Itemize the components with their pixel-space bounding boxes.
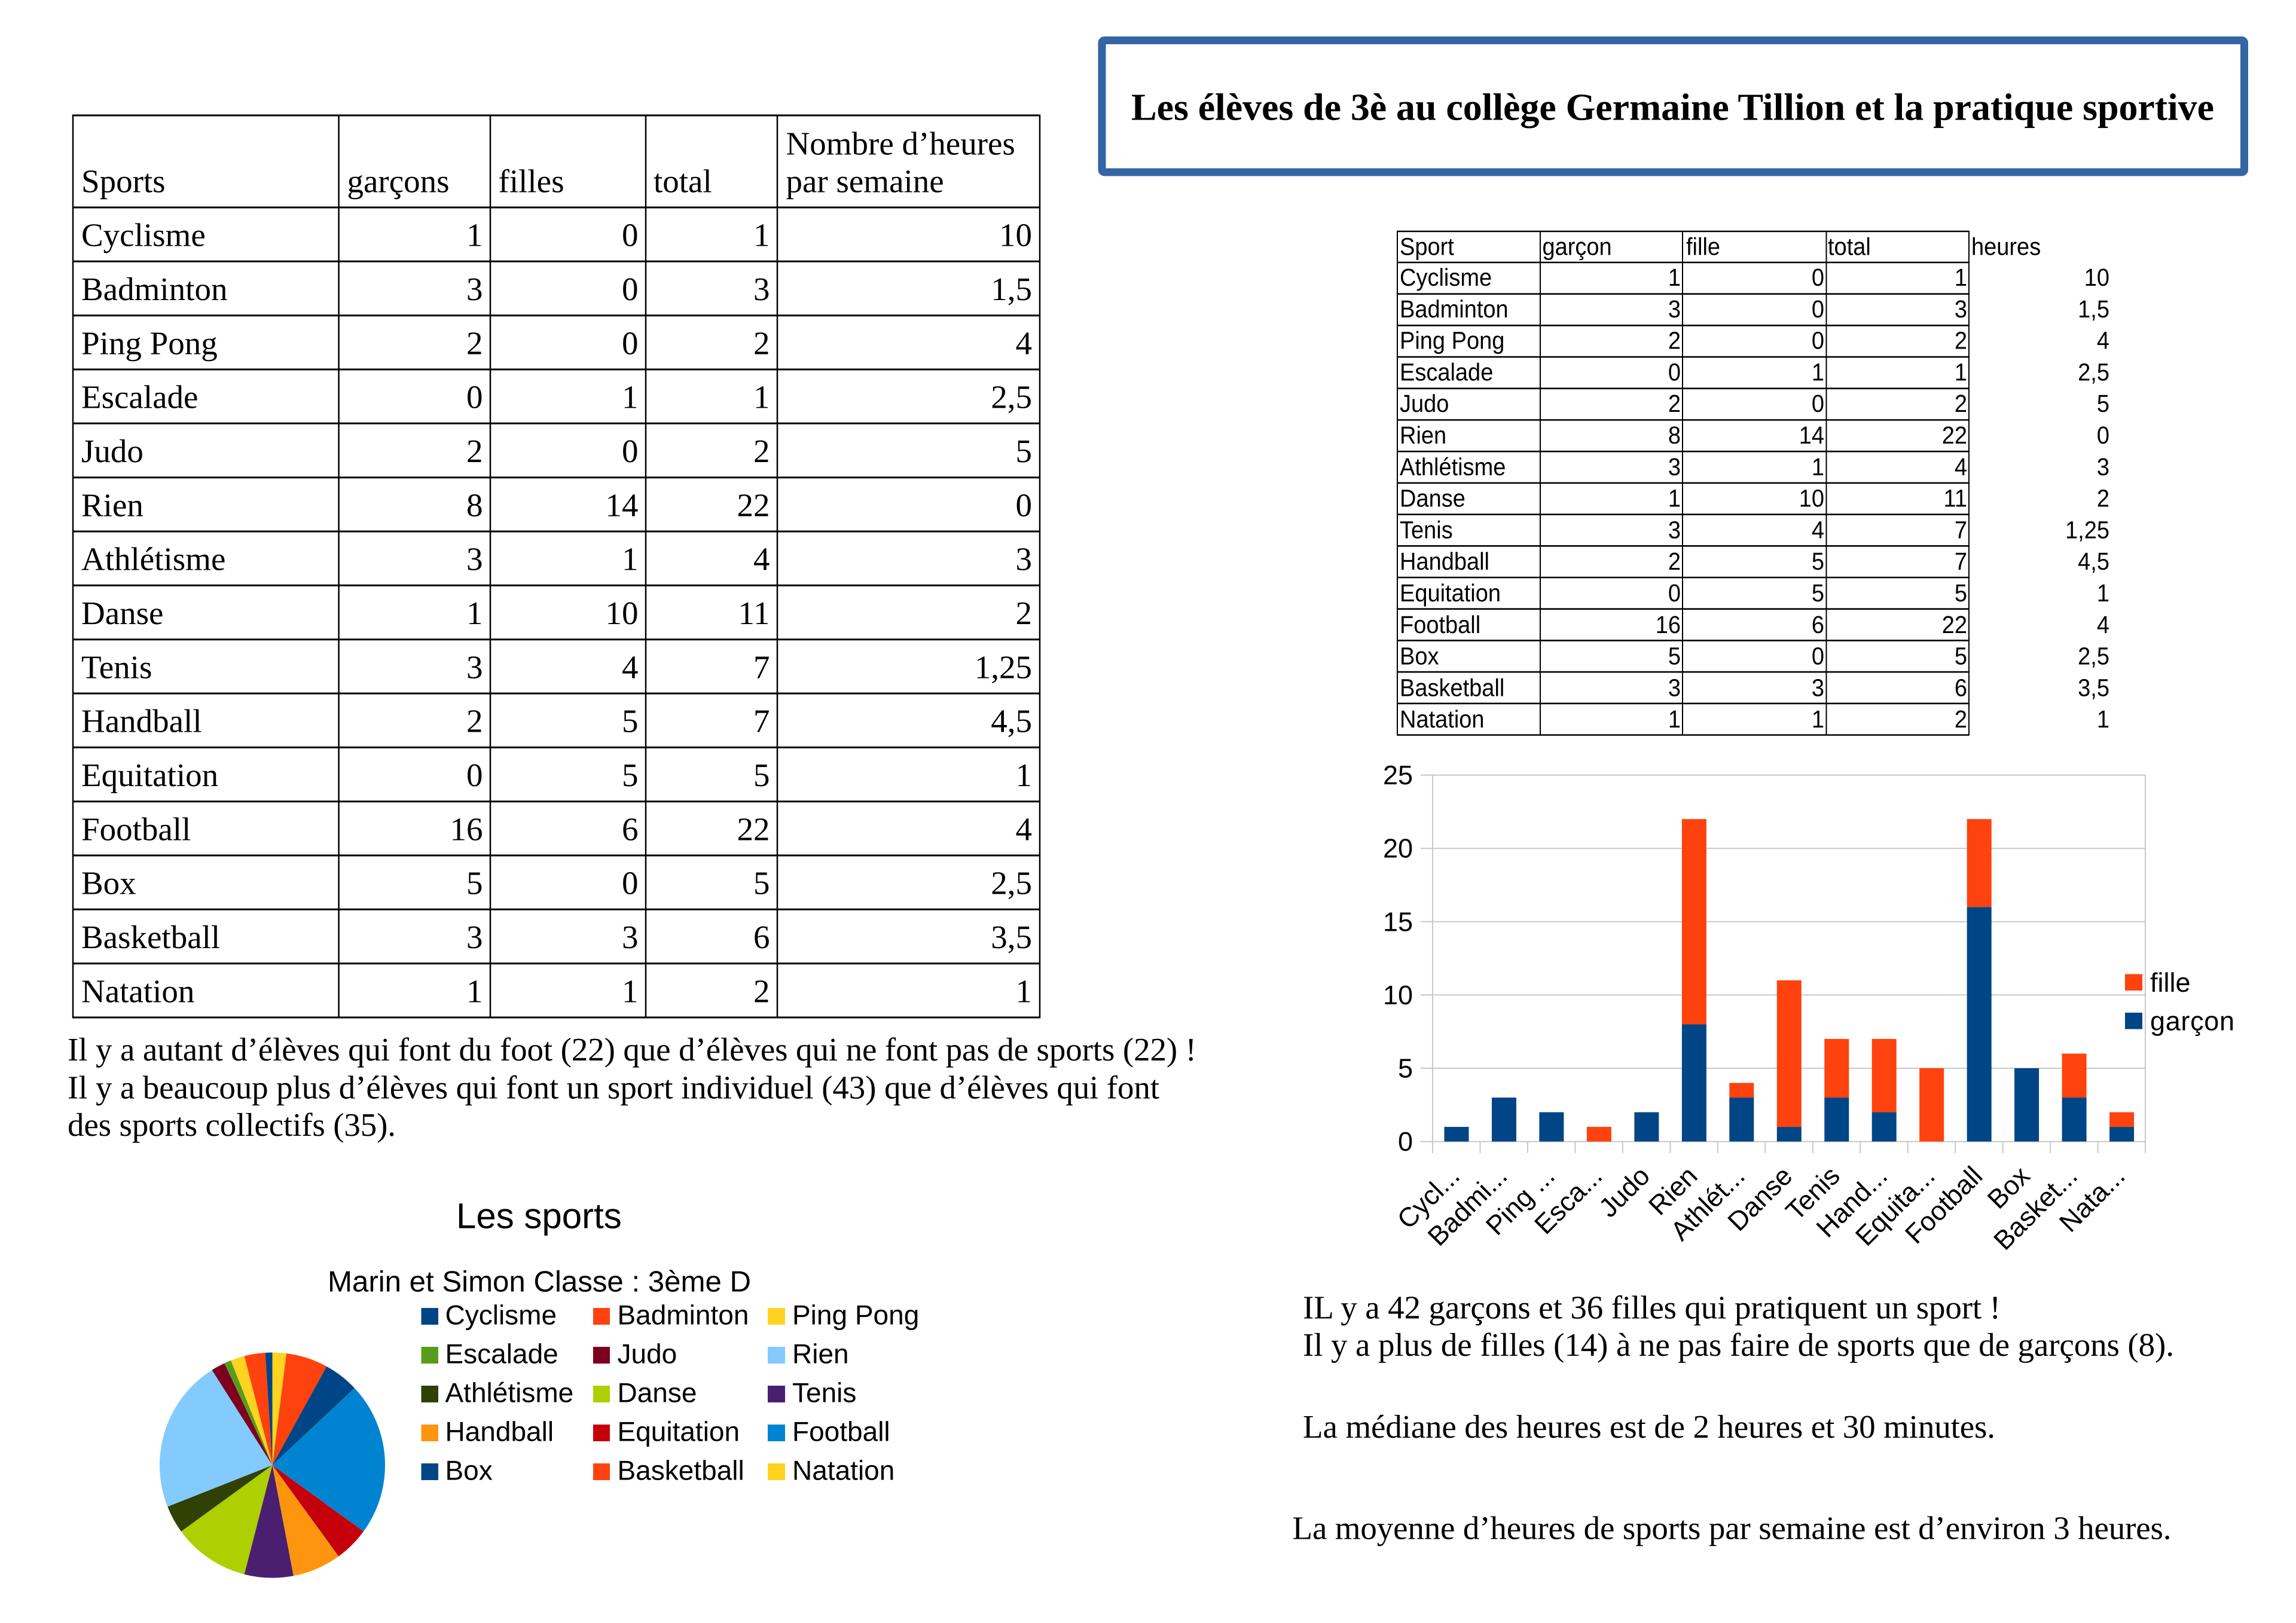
spreadsheet row: Football: 22: [1942, 612, 1967, 639]
spreadsheet header row: Sport: [1400, 234, 1454, 261]
text block: garçons et filles findings: IL y a 42 garçons et 36 filles qui pratiquent un sport !: [1303, 1289, 2001, 1326]
spreadsheet row: Danse: 10: [1799, 485, 1824, 512]
table header row: par semaine: [786, 163, 944, 200]
row: Rien: 22: [737, 487, 770, 523]
row: Equitation: 0: [466, 757, 483, 793]
row: Equitation: [81, 757, 1032, 793]
spreadsheet row: Badminton: [1400, 296, 2109, 323]
row: Badminton: Badminton: [81, 271, 227, 307]
row: Cyclisme: Cyclisme: [81, 217, 206, 253]
row: Judo: 2: [466, 433, 483, 469]
spreadsheet row: Cyclisme: 1: [1668, 264, 1681, 292]
row: Escalade: 1: [622, 379, 639, 415]
spreadsheet row: Handball: Handball: [1400, 549, 1489, 576]
pie chart legend: Ping Pong: [792, 1300, 919, 1331]
pie chart legend: Basketball: [617, 1455, 744, 1486]
spreadsheet row: Handball: 4,5: [2078, 549, 2109, 576]
row: Rien: 0: [1015, 487, 1032, 523]
title banner: [1102, 41, 2245, 172]
row: Equitation: 1: [1015, 757, 1032, 793]
spreadsheet row: Tenis: Tenis: [1400, 517, 1453, 544]
pie chart legend: Natation: [792, 1455, 894, 1486]
pie chart panel: les sports: [160, 1196, 919, 1578]
spreadsheet row: Natation: 2: [1955, 707, 1967, 733]
pie chart legend: Badminton: [617, 1300, 749, 1331]
row: Natation: 1: [1015, 973, 1032, 1009]
spreadsheet row: Ping Pong: 2: [1668, 328, 1681, 354]
spreadsheet row: Box: Box: [1400, 643, 1439, 670]
row: Equitation: Equitation: [81, 757, 218, 793]
row: Equitation: 5: [753, 757, 770, 793]
row: Tenis: Tenis: [81, 649, 152, 685]
spreadsheet row: Handball: [1400, 549, 2109, 576]
x axis labels: Basket...: [1987, 1160, 2083, 1256]
row: Natation: [81, 973, 1032, 1009]
row: Natation: 1: [466, 973, 483, 1009]
row: Handball: 2: [466, 703, 483, 739]
spreadsheet row: Judo: 5: [2097, 391, 2109, 418]
text block: garçons et filles findings: Il y a plus de filles (14) à ne pas faire de sports que de garçons (8).: [1303, 1326, 2174, 1363]
row: Basketball: [81, 919, 1032, 955]
text block: mean hours: La moyenne d’heures de sports par semaine est d’environ 3 heures.: [1293, 1509, 2172, 1546]
row: Badminton: 3: [753, 271, 770, 307]
spreadsheet row: Cyclisme: 0: [1812, 264, 1824, 292]
row: Football: Football: [81, 811, 191, 847]
row: Box: [81, 865, 1032, 901]
row: Rien: 8: [466, 487, 483, 523]
spreadsheet table: [1397, 231, 2109, 735]
spreadsheet row: Judo: 0: [1812, 391, 1824, 418]
row: Danse: 11: [738, 595, 770, 631]
row: Athlétisme: [81, 541, 1032, 577]
spreadsheet row: Judo: 2: [1668, 391, 1681, 418]
row: Badminton: 0: [622, 271, 639, 307]
spreadsheet row: Danse: 11: [1944, 485, 1967, 512]
row: Natation: 2: [753, 973, 770, 1009]
row: Ping Pong: 2: [466, 325, 483, 361]
row: Box: 5: [466, 865, 483, 901]
pie chart title: Les sports: [456, 1196, 622, 1236]
pie chart legend: Tenis: [792, 1377, 856, 1408]
row: Cyclisme: 1: [466, 217, 483, 253]
x axis labels: Football: [1899, 1160, 1988, 1249]
spreadsheet row: Ping Pong: Ping Pong: [1400, 328, 1504, 354]
row: Box: Box: [81, 865, 136, 901]
bar chart legend: [2125, 967, 2234, 1037]
row: Judo: 5: [1015, 433, 1032, 469]
table header row: garçons: [347, 163, 450, 200]
spreadsheet row: Danse: Danse: [1400, 485, 1465, 512]
spreadsheet header row: [1400, 234, 2041, 261]
row: Handball: 4,5: [991, 703, 1032, 739]
row: Athlétisme: Athlétisme: [81, 541, 225, 577]
spreadsheet row: Escalade: 1: [1955, 359, 1967, 386]
pie chart legend: Cyclisme: [445, 1300, 557, 1331]
spreadsheet row: Athlétisme: 1: [1812, 454, 1824, 481]
spreadsheet row: Rien: 8: [1668, 422, 1681, 450]
y axis labels: 10: [1383, 980, 1413, 1010]
spreadsheet row: Athlétisme: Athlétisme: [1400, 454, 1506, 481]
x axis labels: Box: [1981, 1160, 2036, 1215]
text block: foot and individual sports findings: Il y a beaucoup plus d’élèves qui font un sport individuel (43) que d’élèves qui font: [68, 1069, 1159, 1105]
spreadsheet row: Football: 6: [1812, 612, 1824, 639]
row: Box: 2,5: [991, 865, 1032, 901]
row: Football: [81, 811, 1032, 847]
row: Handball: 5: [622, 703, 639, 739]
stacked bar chart: garçon / fille by sport: [1383, 760, 2234, 1256]
spreadsheet row: Basketball: [1400, 675, 2109, 702]
spreadsheet row: Box: [1400, 643, 2109, 670]
spreadsheet row: Ping Pong: 4: [2097, 328, 2109, 354]
row: Tenis: 3: [466, 649, 483, 685]
spreadsheet row: Box: 2,5: [2078, 643, 2109, 670]
text block: foot and individual sports findings: Il y a autant d’élèves qui font du foot (22) que d’élèves qui ne font pas de sports (22) !: [68, 1031, 1196, 1068]
row: Escalade: 2,5: [991, 379, 1032, 415]
x axis labels: Badmi...: [1422, 1160, 1513, 1252]
row: Box: 5: [753, 865, 770, 901]
row: Danse: 2: [1015, 595, 1032, 631]
spreadsheet row: Danse: [1400, 485, 2109, 512]
spreadsheet row: Tenis: [1400, 517, 2109, 544]
row: Judo: [81, 433, 1032, 469]
spreadsheet row: Basketball: Basketball: [1400, 675, 1504, 702]
spreadsheet row: Rien: 0: [2097, 422, 2109, 450]
row: Basketball: 6: [753, 919, 770, 955]
table header row: Nombre d’heures: [786, 126, 1015, 161]
row: Danse: [81, 595, 1032, 631]
spreadsheet row: Escalade: 0: [1668, 359, 1681, 386]
row: Athlétisme: 1: [622, 541, 639, 577]
spreadsheet row: Ping Pong: 0: [1812, 328, 1824, 354]
row: Escalade: Escalade: [81, 379, 198, 415]
row: Danse: Danse: [81, 595, 163, 631]
x axis labels: Cycl...: [1391, 1160, 1465, 1234]
x axis labels: [1391, 1160, 2131, 1256]
spreadsheet row: Athlétisme: 4: [1955, 454, 1967, 481]
row: Football: 16: [450, 811, 483, 847]
spreadsheet row: Football: 4: [2097, 612, 2109, 639]
row: Escalade: [81, 379, 1032, 415]
spreadsheet row: Tenis: 7: [1955, 517, 1967, 544]
spreadsheet row: Judo: [1400, 391, 2109, 418]
spreadsheet row: Basketball: 3: [1812, 675, 1824, 702]
bar chart legend: garçon: [2150, 1005, 2234, 1037]
spreadsheet row: Ping Pong: [1400, 328, 2109, 354]
row: Ping Pong: 4: [1015, 325, 1032, 361]
spreadsheet row: Handball: 7: [1955, 549, 1967, 576]
bar chart legend: fille: [2150, 967, 2191, 998]
row: Tenis: [81, 649, 1032, 685]
y axis labels: 0: [1398, 1126, 1413, 1157]
row: Cyclisme: 10: [999, 217, 1032, 253]
row: Equitation: 5: [622, 757, 639, 793]
spreadsheet row: Natation: [1400, 707, 2109, 733]
spreadsheet row: Escalade: 2,5: [2078, 359, 2109, 386]
spreadsheet row: Box: 5: [1668, 643, 1681, 670]
spreadsheet row: Escalade: [1400, 359, 2109, 386]
y axis labels: 25: [1383, 760, 1413, 790]
spreadsheet row: Equitation: 0: [1668, 580, 1681, 607]
row: Basketball: 3: [622, 919, 639, 955]
row: Football: 6: [622, 811, 639, 847]
spreadsheet row: Tenis: 1,25: [2065, 517, 2109, 544]
row: Escalade: 0: [466, 379, 483, 415]
spreadsheet header row: fille: [1686, 234, 1720, 261]
spreadsheet row: Box: 0: [1812, 643, 1824, 670]
text block: median hours: La médiane des heures est de 2 heures et 30 minutes.: [1303, 1408, 1995, 1445]
spreadsheet row: Basketball: 6: [1955, 675, 1967, 702]
table header row: Sports: [81, 163, 166, 200]
spreadsheet row: Ping Pong: 2: [1955, 328, 1967, 354]
row: Rien: 14: [605, 487, 639, 523]
y axis labels: 5: [1398, 1053, 1413, 1083]
row: Judo: 0: [622, 433, 639, 469]
row: Handball: 7: [753, 703, 770, 739]
row: Athlétisme: 3: [466, 541, 483, 577]
spreadsheet row: Handball: 5: [1812, 549, 1824, 576]
x axis labels: Hand...: [1810, 1160, 1893, 1243]
spreadsheet row: Athlétisme: [1400, 454, 2109, 481]
spreadsheet row: Judo: Judo: [1400, 391, 1449, 418]
row: Danse: 1: [466, 595, 483, 631]
spreadsheet row: Cyclisme: 10: [2084, 264, 2109, 292]
row: Basketball: 3,5: [991, 919, 1032, 955]
spreadsheet row: Badminton: 3: [1668, 296, 1681, 323]
spreadsheet row: Equitation: 5: [1955, 580, 1967, 607]
row: Danse: 10: [605, 595, 639, 631]
row: Ping Pong: 2: [753, 325, 770, 361]
spreadsheet row: Box: 5: [1955, 643, 1967, 670]
row: Natation: Natation: [81, 973, 194, 1009]
text block: foot and individual sports findings: [68, 1031, 1196, 1143]
row: Football: 22: [737, 811, 770, 847]
row: Handball: [81, 703, 1032, 739]
x axis labels: Nata...: [2053, 1160, 2131, 1238]
row: Badminton: 1,5: [991, 271, 1032, 307]
spreadsheet row: Equitation: Equitation: [1400, 580, 1501, 607]
table header row: total: [654, 163, 712, 200]
pie chart legend: Judo: [617, 1338, 677, 1370]
spreadsheet row: Equitation: 5: [1812, 580, 1824, 607]
spreadsheet row: Rien: 14: [1799, 422, 1824, 450]
row: Athlétisme: 4: [753, 541, 770, 577]
x axis labels: Danse: [1721, 1160, 1798, 1237]
spreadsheet row: Football: Football: [1400, 612, 1480, 639]
row: Tenis: 1,25: [975, 649, 1032, 685]
garçon bars: [1445, 907, 2134, 1142]
spreadsheet row: Cyclisme: [1400, 264, 2109, 292]
row: Football: 4: [1015, 811, 1032, 847]
x axis labels: Athlét...: [1665, 1160, 1751, 1246]
row: Basketball: 3: [466, 919, 483, 955]
row: Athlétisme: 3: [1015, 541, 1032, 577]
row: Handball: Handball: [81, 703, 202, 739]
spreadsheet row: Natation: 1: [1812, 707, 1824, 733]
spreadsheet row: Danse: 1: [1668, 485, 1681, 512]
row: Escalade: 1: [753, 379, 770, 415]
title: Les élèves de 3è au collège Germaine Tillion et la pratique sportive: [1131, 86, 2214, 129]
spreadsheet row: Danse: 2: [2097, 485, 2109, 512]
row: Rien: [81, 487, 1032, 523]
x axis labels: Rien: [1642, 1160, 1703, 1221]
pie chart: [160, 1352, 385, 1578]
spreadsheet header row: heures: [1971, 234, 2041, 261]
row: Rien: Rien: [81, 487, 144, 523]
pie chart legend: Danse: [617, 1377, 697, 1408]
row: Cyclisme: 1: [753, 217, 770, 253]
x axis labels: Tenis: [1780, 1160, 1846, 1226]
pie chart subtitle: Marin et Simon Classe : 3ème D: [328, 1266, 751, 1298]
spreadsheet row: Natation: Natation: [1400, 707, 1485, 733]
x axis labels: Judo: [1593, 1160, 1656, 1223]
spreadsheet row: Tenis: 4: [1812, 517, 1824, 544]
fille bars: [1587, 819, 2134, 1142]
main data table: [73, 115, 1040, 1019]
table header row: [81, 126, 1015, 200]
spreadsheet row: Football: [1400, 612, 2109, 639]
row: Judo: 2: [753, 433, 770, 469]
pie chart legend: Equitation: [617, 1416, 740, 1447]
spreadsheet row: Rien: Rien: [1400, 422, 1446, 450]
row: Box: 0: [622, 865, 639, 901]
x axis labels: Esca...: [1528, 1160, 1608, 1240]
spreadsheet row: Athlétisme: 3: [2097, 454, 2109, 481]
spreadsheet row: Badminton: 0: [1812, 296, 1824, 323]
x axis labels: Ping ...: [1480, 1160, 1561, 1241]
spreadsheet header row: garçon: [1543, 234, 1612, 261]
pie chart legend: Handball: [445, 1416, 554, 1447]
x axis labels: Equita...: [1849, 1160, 1941, 1252]
y axis labels: 15: [1383, 906, 1413, 937]
row: Natation: 1: [622, 973, 639, 1009]
y axis labels: [1383, 760, 1413, 1157]
row: Badminton: [81, 271, 1032, 307]
row: Basketball: Basketball: [81, 919, 220, 955]
pie chart legend: [421, 1300, 919, 1486]
row: Cyclisme: 0: [622, 217, 639, 253]
text block: garçons et filles findings: [1303, 1289, 2174, 1363]
spreadsheet row: Football: 16: [1656, 612, 1681, 639]
pie chart legend: Football: [792, 1416, 890, 1447]
spreadsheet row: Escalade: 1: [1812, 359, 1824, 386]
text block: foot and individual sports findings: des sports collectifs (35).: [68, 1107, 396, 1143]
spreadsheet row: Cyclisme: 1: [1955, 264, 1967, 292]
row: Judo: Judo: [81, 433, 144, 469]
spreadsheet row: Badminton: 1,5: [2078, 296, 2109, 323]
pie chart legend: Escalade: [445, 1338, 558, 1370]
spreadsheet row: Rien: [1400, 422, 2109, 450]
pie chart legend: Rien: [792, 1338, 849, 1370]
spreadsheet row: Basketball: 3,5: [2078, 675, 2109, 702]
spreadsheet row: Cyclisme: Cyclisme: [1400, 264, 1492, 292]
row: Badminton: 3: [466, 271, 483, 307]
row: Tenis: 4: [622, 649, 639, 685]
spreadsheet row: Equitation: 1: [2097, 580, 2109, 607]
spreadsheet row: Equitation: [1400, 580, 2109, 607]
spreadsheet row: Handball: 2: [1668, 549, 1681, 576]
spreadsheet row: Badminton: Badminton: [1400, 296, 1509, 323]
spreadsheet row: Escalade: Escalade: [1400, 359, 1493, 386]
spreadsheet row: Badminton: 3: [1955, 296, 1967, 323]
table header row: filles: [499, 163, 564, 200]
spreadsheet row: Natation: 1: [2097, 707, 2109, 733]
pie chart legend: Athlétisme: [445, 1377, 573, 1408]
spreadsheet row: Natation: 1: [1668, 707, 1681, 733]
spreadsheet header row: total: [1828, 234, 1871, 261]
pie chart legend: Box: [445, 1455, 493, 1486]
spreadsheet row: Athlétisme: 3: [1668, 454, 1681, 481]
row: Tenis: 7: [753, 649, 770, 685]
row: Cyclisme: [81, 217, 1032, 253]
row: Ping Pong: 0: [622, 325, 639, 361]
spreadsheet row: Basketball: 3: [1668, 675, 1681, 702]
row: Ping Pong: [81, 325, 1032, 361]
spreadsheet row: Tenis: 3: [1668, 517, 1681, 544]
row: Ping Pong: Ping Pong: [81, 325, 218, 361]
spreadsheet row: Judo: 2: [1955, 391, 1967, 418]
y axis labels: 20: [1383, 833, 1413, 864]
spreadsheet row: Rien: 22: [1942, 422, 1967, 450]
